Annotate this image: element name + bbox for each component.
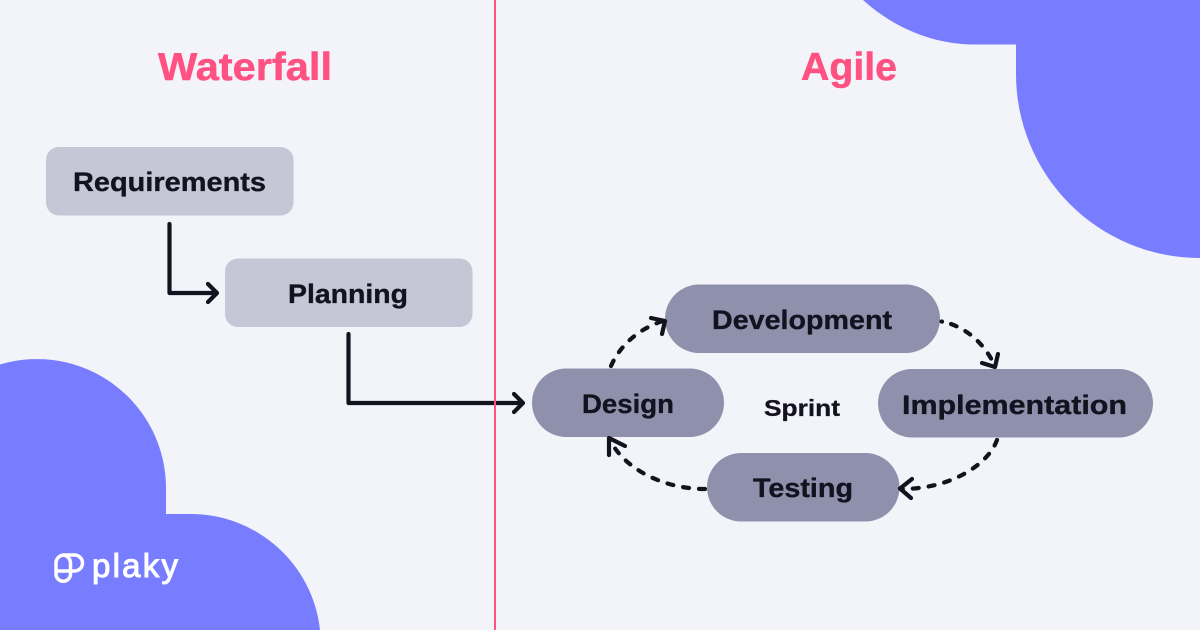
divider line [494, 0, 496, 630]
icon: plaky mark [56, 555, 82, 581]
dashed arrow: Design to Development [611, 318, 665, 366]
agile step: Testing [707, 453, 900, 522]
dashed arrow: Development to Implementation [942, 322, 998, 367]
arrow: Requirements to Planning [170, 224, 217, 302]
agile step: Development: Development [712, 305, 892, 335]
waterfall step: Planning: Planning [288, 279, 408, 309]
logo: plaky [56, 547, 178, 584]
dashed arrow: Testing to Design [609, 438, 705, 489]
decorative blob: top right [863, 0, 1200, 258]
agile step: Design: Design [582, 389, 674, 419]
waterfall step: Planning [225, 258, 472, 327]
agile step: Design [532, 368, 724, 437]
label: Sprint: Sprint [764, 395, 840, 421]
agile step: Testing: Testing [753, 473, 853, 503]
logo wordmark: plaky [92, 547, 178, 584]
agile step: Development [665, 284, 940, 353]
dashed arrow: Implementation to Testing [900, 440, 997, 498]
agile step: Implementation [878, 369, 1153, 438]
arrow: Planning to Design [348, 334, 523, 412]
agile step: Implementation: Implementation [902, 390, 1127, 420]
waterfall step: Requirements: Requirements [73, 167, 266, 197]
waterfall step: Requirements [46, 147, 294, 216]
heading: Agile: Agile [801, 46, 897, 89]
decorative blob: bottom left [0, 359, 320, 630]
heading: Waterfall: Waterfall [158, 46, 332, 89]
